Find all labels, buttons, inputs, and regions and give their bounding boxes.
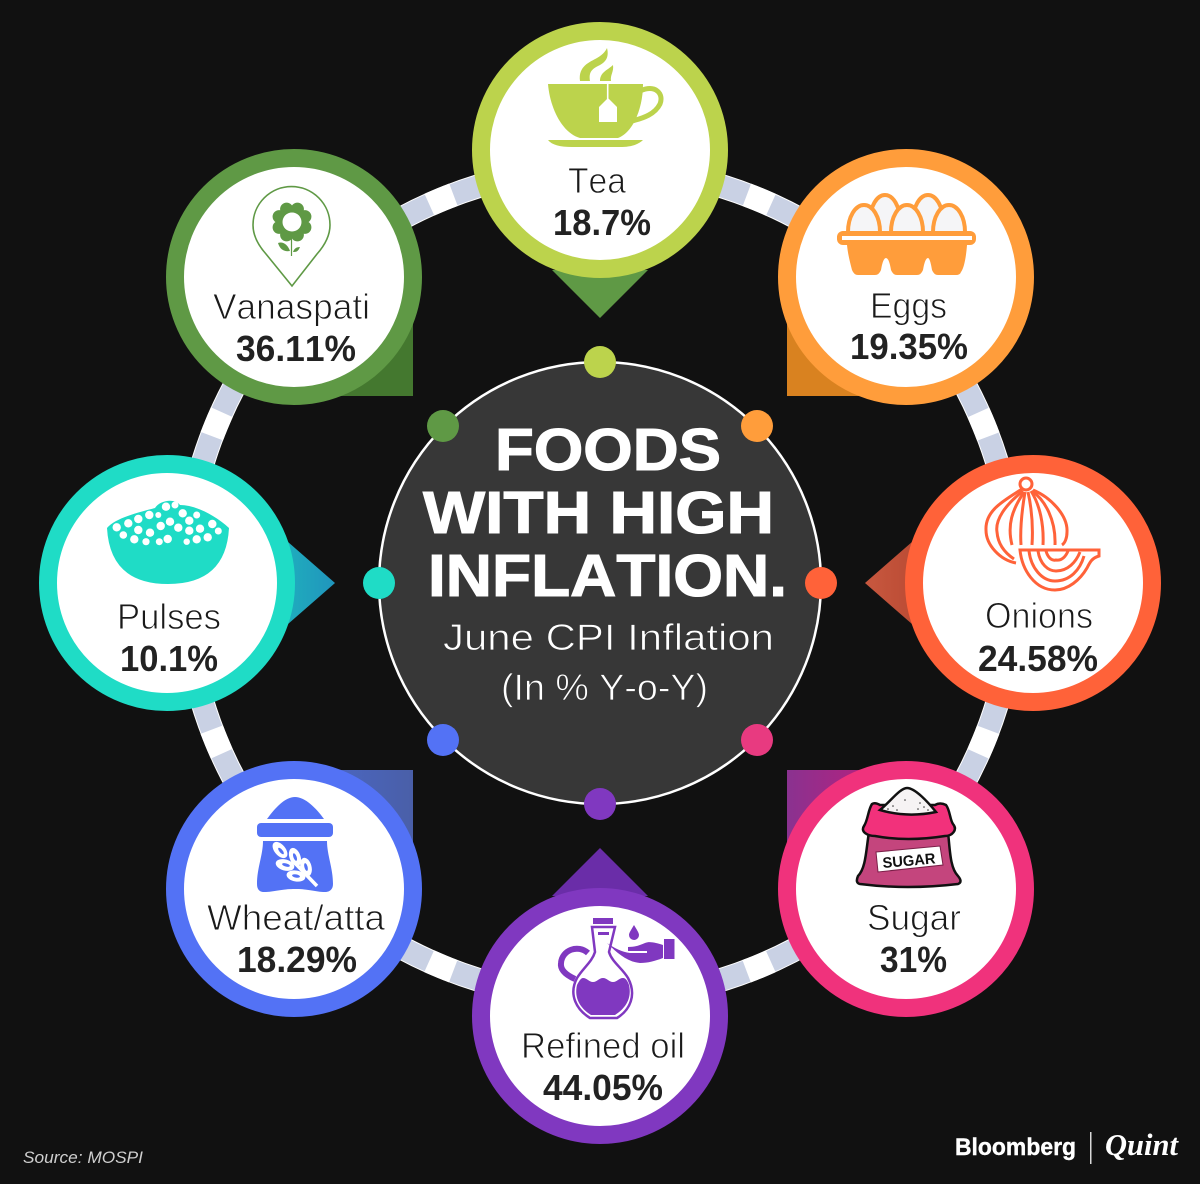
logo: Bloomberg Quint xyxy=(955,1127,1179,1164)
label: onions: Onions xyxy=(985,595,1093,636)
subtitle: June CPI Inflation xyxy=(443,617,774,658)
value: onions: 24.58% xyxy=(978,638,1098,679)
panel: wheat/atta xyxy=(175,770,413,1008)
panel: vanaspati xyxy=(175,158,413,396)
value: wheat/atta: 18.29% xyxy=(237,939,357,980)
pointer: vanaspati xyxy=(320,320,413,396)
label: sugar: Sugar xyxy=(867,897,961,938)
label: wheat/atta: Wheat/atta xyxy=(207,897,386,938)
dashed connector ring xyxy=(185,168,1015,998)
label: refined oil: Refined oil xyxy=(521,1025,685,1066)
panel: onions xyxy=(865,464,1152,702)
icon: oil jug xyxy=(561,918,674,1018)
pointer: eggs xyxy=(787,320,880,396)
panel: tea xyxy=(481,31,719,318)
icon: flower pin xyxy=(253,187,330,286)
logo: Bloomberg Quint: Quint xyxy=(1105,1127,1179,1162)
icon: tea cup xyxy=(548,48,661,147)
title xyxy=(423,417,787,609)
panel: center title circle xyxy=(379,362,821,804)
label: pulses: Pulses xyxy=(117,596,221,637)
pointer: sugar xyxy=(787,770,880,863)
pointer: pulses xyxy=(280,535,335,631)
icon: egg tray xyxy=(837,195,976,275)
ring dots xyxy=(363,346,837,820)
icon: sugar sack: SUGAR xyxy=(882,850,936,872)
logo: Bloomberg Quint: Bloomberg xyxy=(955,1134,1076,1161)
icon: onion xyxy=(986,478,1099,590)
badge: pulses xyxy=(48,464,286,702)
panel: eggs xyxy=(787,158,1025,396)
icon: bowl of pulses xyxy=(107,501,229,584)
value: vanaspati: 36.11% xyxy=(236,328,356,369)
panel: refined oil xyxy=(481,848,719,1135)
value: sugar: 31% xyxy=(880,939,947,980)
value: refined oil: 44.05% xyxy=(543,1067,663,1108)
source note: Source: MOSPI xyxy=(23,1148,143,1167)
pointer: wheat/atta xyxy=(320,770,413,863)
label: eggs: Eggs xyxy=(870,285,947,326)
icon: sugar sack xyxy=(857,788,960,887)
title: WITH HIGH xyxy=(423,480,774,546)
value: eggs: 19.35% xyxy=(850,326,968,367)
value: pulses: 10.1% xyxy=(120,638,218,679)
panel: pulses xyxy=(48,464,335,702)
value: tea: 18.7% xyxy=(553,202,651,243)
subtitle xyxy=(443,617,774,708)
badge: tea xyxy=(481,31,719,269)
panel: sugar xyxy=(787,770,1025,1008)
title: INFLATION. xyxy=(428,543,787,609)
badge: onions xyxy=(914,464,1152,702)
badge: vanaspati xyxy=(175,158,413,396)
badge: sugar xyxy=(787,770,1025,1008)
label: vanaspati: Vanaspati xyxy=(213,286,370,327)
badge: eggs xyxy=(787,158,1025,396)
pointer: onions xyxy=(865,535,920,631)
pointer: tea xyxy=(552,270,648,318)
badge: wheat/atta xyxy=(175,770,413,1008)
title: FOODS xyxy=(495,417,721,483)
label: tea: Tea xyxy=(568,160,627,201)
pointer: refined oil xyxy=(552,848,648,896)
subtitle: (In % Y-o-Y) xyxy=(501,667,708,708)
badge: refined oil xyxy=(481,897,719,1135)
icon: flour sack xyxy=(257,797,333,892)
